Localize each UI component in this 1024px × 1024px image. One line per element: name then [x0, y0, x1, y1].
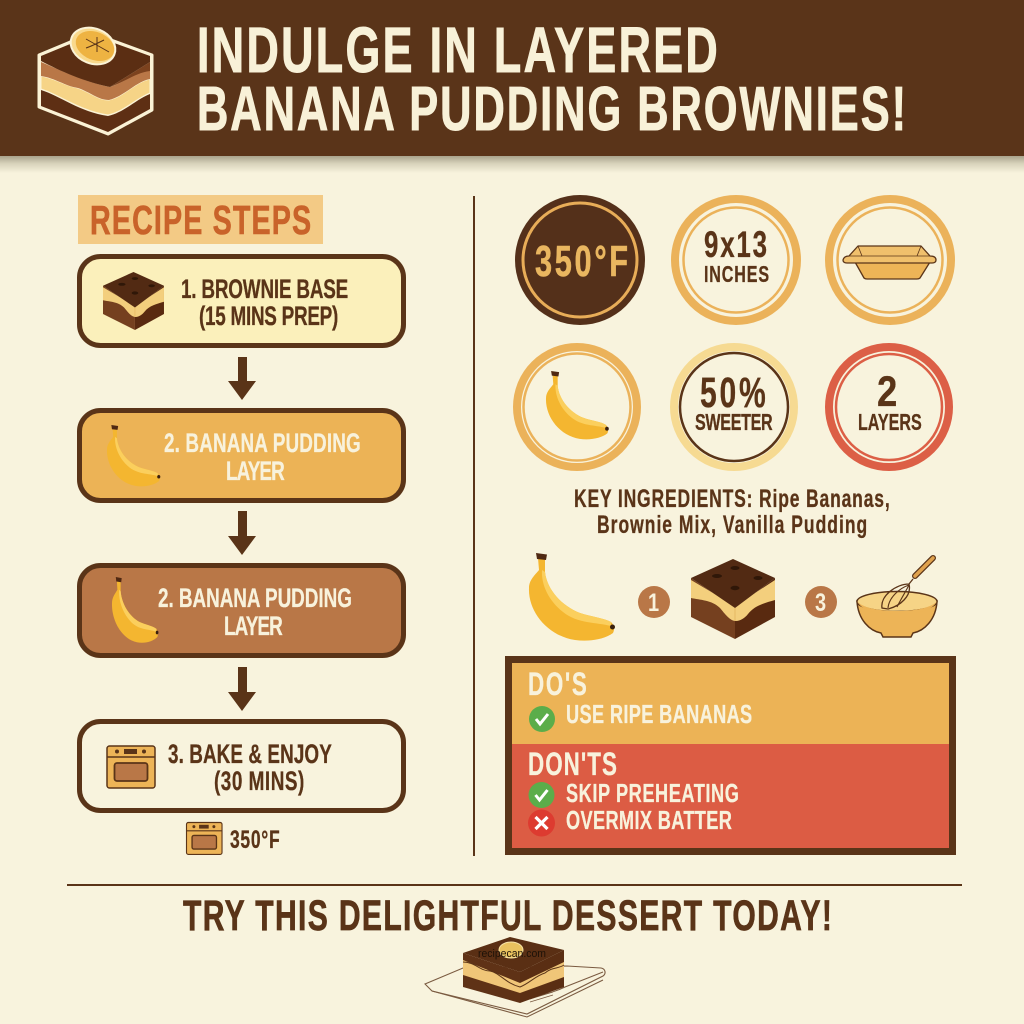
icon: check	[529, 706, 555, 732]
icon: large brownie	[691, 559, 775, 639]
badge: 9x13 inches: 9x13	[704, 223, 767, 265]
key ingredients text: KEY INGREDIENTS: Ripe Bananas,	[574, 484, 890, 513]
oven temperature note: 350°F	[230, 825, 280, 854]
arrow: to bake step	[228, 667, 256, 711]
illustration: brownie on plate	[425, 937, 605, 1017]
step 1 text: (15 MINS PREP)	[199, 301, 338, 331]
number marker 3: 3	[815, 589, 826, 617]
icon: cross	[528, 810, 555, 836]
badge: banana	[517, 347, 637, 467]
key ingredients text	[574, 484, 890, 539]
badge: 2 layers: LAYERS	[858, 410, 922, 436]
watermark: recipecan.com	[478, 948, 546, 960]
step 1 text: 1. BROWNIE BASE	[181, 274, 348, 304]
heading: recipe steps: RECIPE STEPS	[90, 198, 311, 243]
badge: 50 percent sweeter: 50%	[700, 368, 766, 416]
panel: repeated banana pudding layer step	[80, 566, 404, 656]
step 2 text: 2. BANANA PUDDING	[164, 428, 361, 458]
arrow: step 2 to next step	[228, 511, 256, 555]
panel: step 1 brownie base	[80, 256, 404, 346]
icon: banana	[546, 371, 609, 439]
badge: 50 percent sweeter	[674, 347, 794, 467]
panel: dos and donts	[505, 656, 956, 855]
step 2 text: LAYER	[226, 456, 285, 486]
icon: brownie	[103, 272, 164, 330]
title: BANANA PUDDING BROWNIES!	[197, 76, 906, 144]
number marker 1	[638, 586, 670, 618]
repeated step text	[158, 583, 352, 641]
badge: baking pan	[829, 199, 951, 321]
arrow: step 1 to step 2	[228, 357, 256, 400]
step 2 text	[164, 428, 361, 486]
title: INDULGE IN LAYERED	[197, 14, 718, 86]
footer call to action: TRY THIS DELIGHTFUL DESSERT TODAY!	[183, 891, 832, 939]
key ingredients text: Brownie Mix, Vanilla Pudding	[597, 510, 867, 539]
donts section: OVERMIX BATTER	[566, 806, 732, 835]
donts section: SKIP PREHEATING	[566, 779, 739, 808]
badge: 350F: 350°F	[535, 238, 628, 286]
donts section	[512, 744, 949, 848]
icon: baking pan	[843, 246, 936, 279]
panel: step 3 bake and enjoy	[80, 722, 404, 810]
step 3 text: 3. BAKE & ENJOY	[168, 739, 332, 769]
icon: banana on brown	[112, 577, 158, 643]
icon: large banana	[529, 553, 615, 641]
title	[197, 14, 906, 144]
step 1 text	[181, 274, 348, 331]
icon: layered brownie with banana slice	[39, 21, 152, 134]
column divider	[473, 196, 475, 856]
icon: banana	[107, 425, 160, 486]
badge: 9x13 inches	[675, 199, 797, 321]
repeated step text: 2. BANANA PUDDING	[158, 583, 352, 613]
icon: oven	[107, 746, 155, 788]
header banner	[0, 0, 1024, 173]
donts section: DON'TS	[528, 746, 617, 782]
dos section: DO'S	[528, 666, 587, 702]
badge: 50 percent sweeter: SWEETER	[695, 410, 773, 436]
icon: check	[528, 782, 554, 808]
icon: mixing bowl with whisk	[857, 558, 937, 637]
badge: 350F	[515, 195, 645, 325]
step 3 text: (30 MINS)	[214, 766, 304, 796]
dos section: USE RIPE BANANAS	[566, 700, 752, 729]
number marker 3	[805, 586, 837, 618]
dos section	[512, 663, 949, 744]
badge: 9x13 inches: INCHES	[704, 262, 769, 288]
repeated step text: LAYER	[224, 611, 283, 641]
step 3 text	[168, 739, 332, 796]
number marker 1: 1	[648, 589, 659, 617]
footer divider	[67, 884, 962, 886]
panel: step 2 banana pudding layer	[80, 410, 404, 500]
oven temperature note	[186, 822, 280, 854]
badge: 2 layers: 2	[877, 368, 897, 416]
badge: 2 layers	[829, 347, 949, 467]
